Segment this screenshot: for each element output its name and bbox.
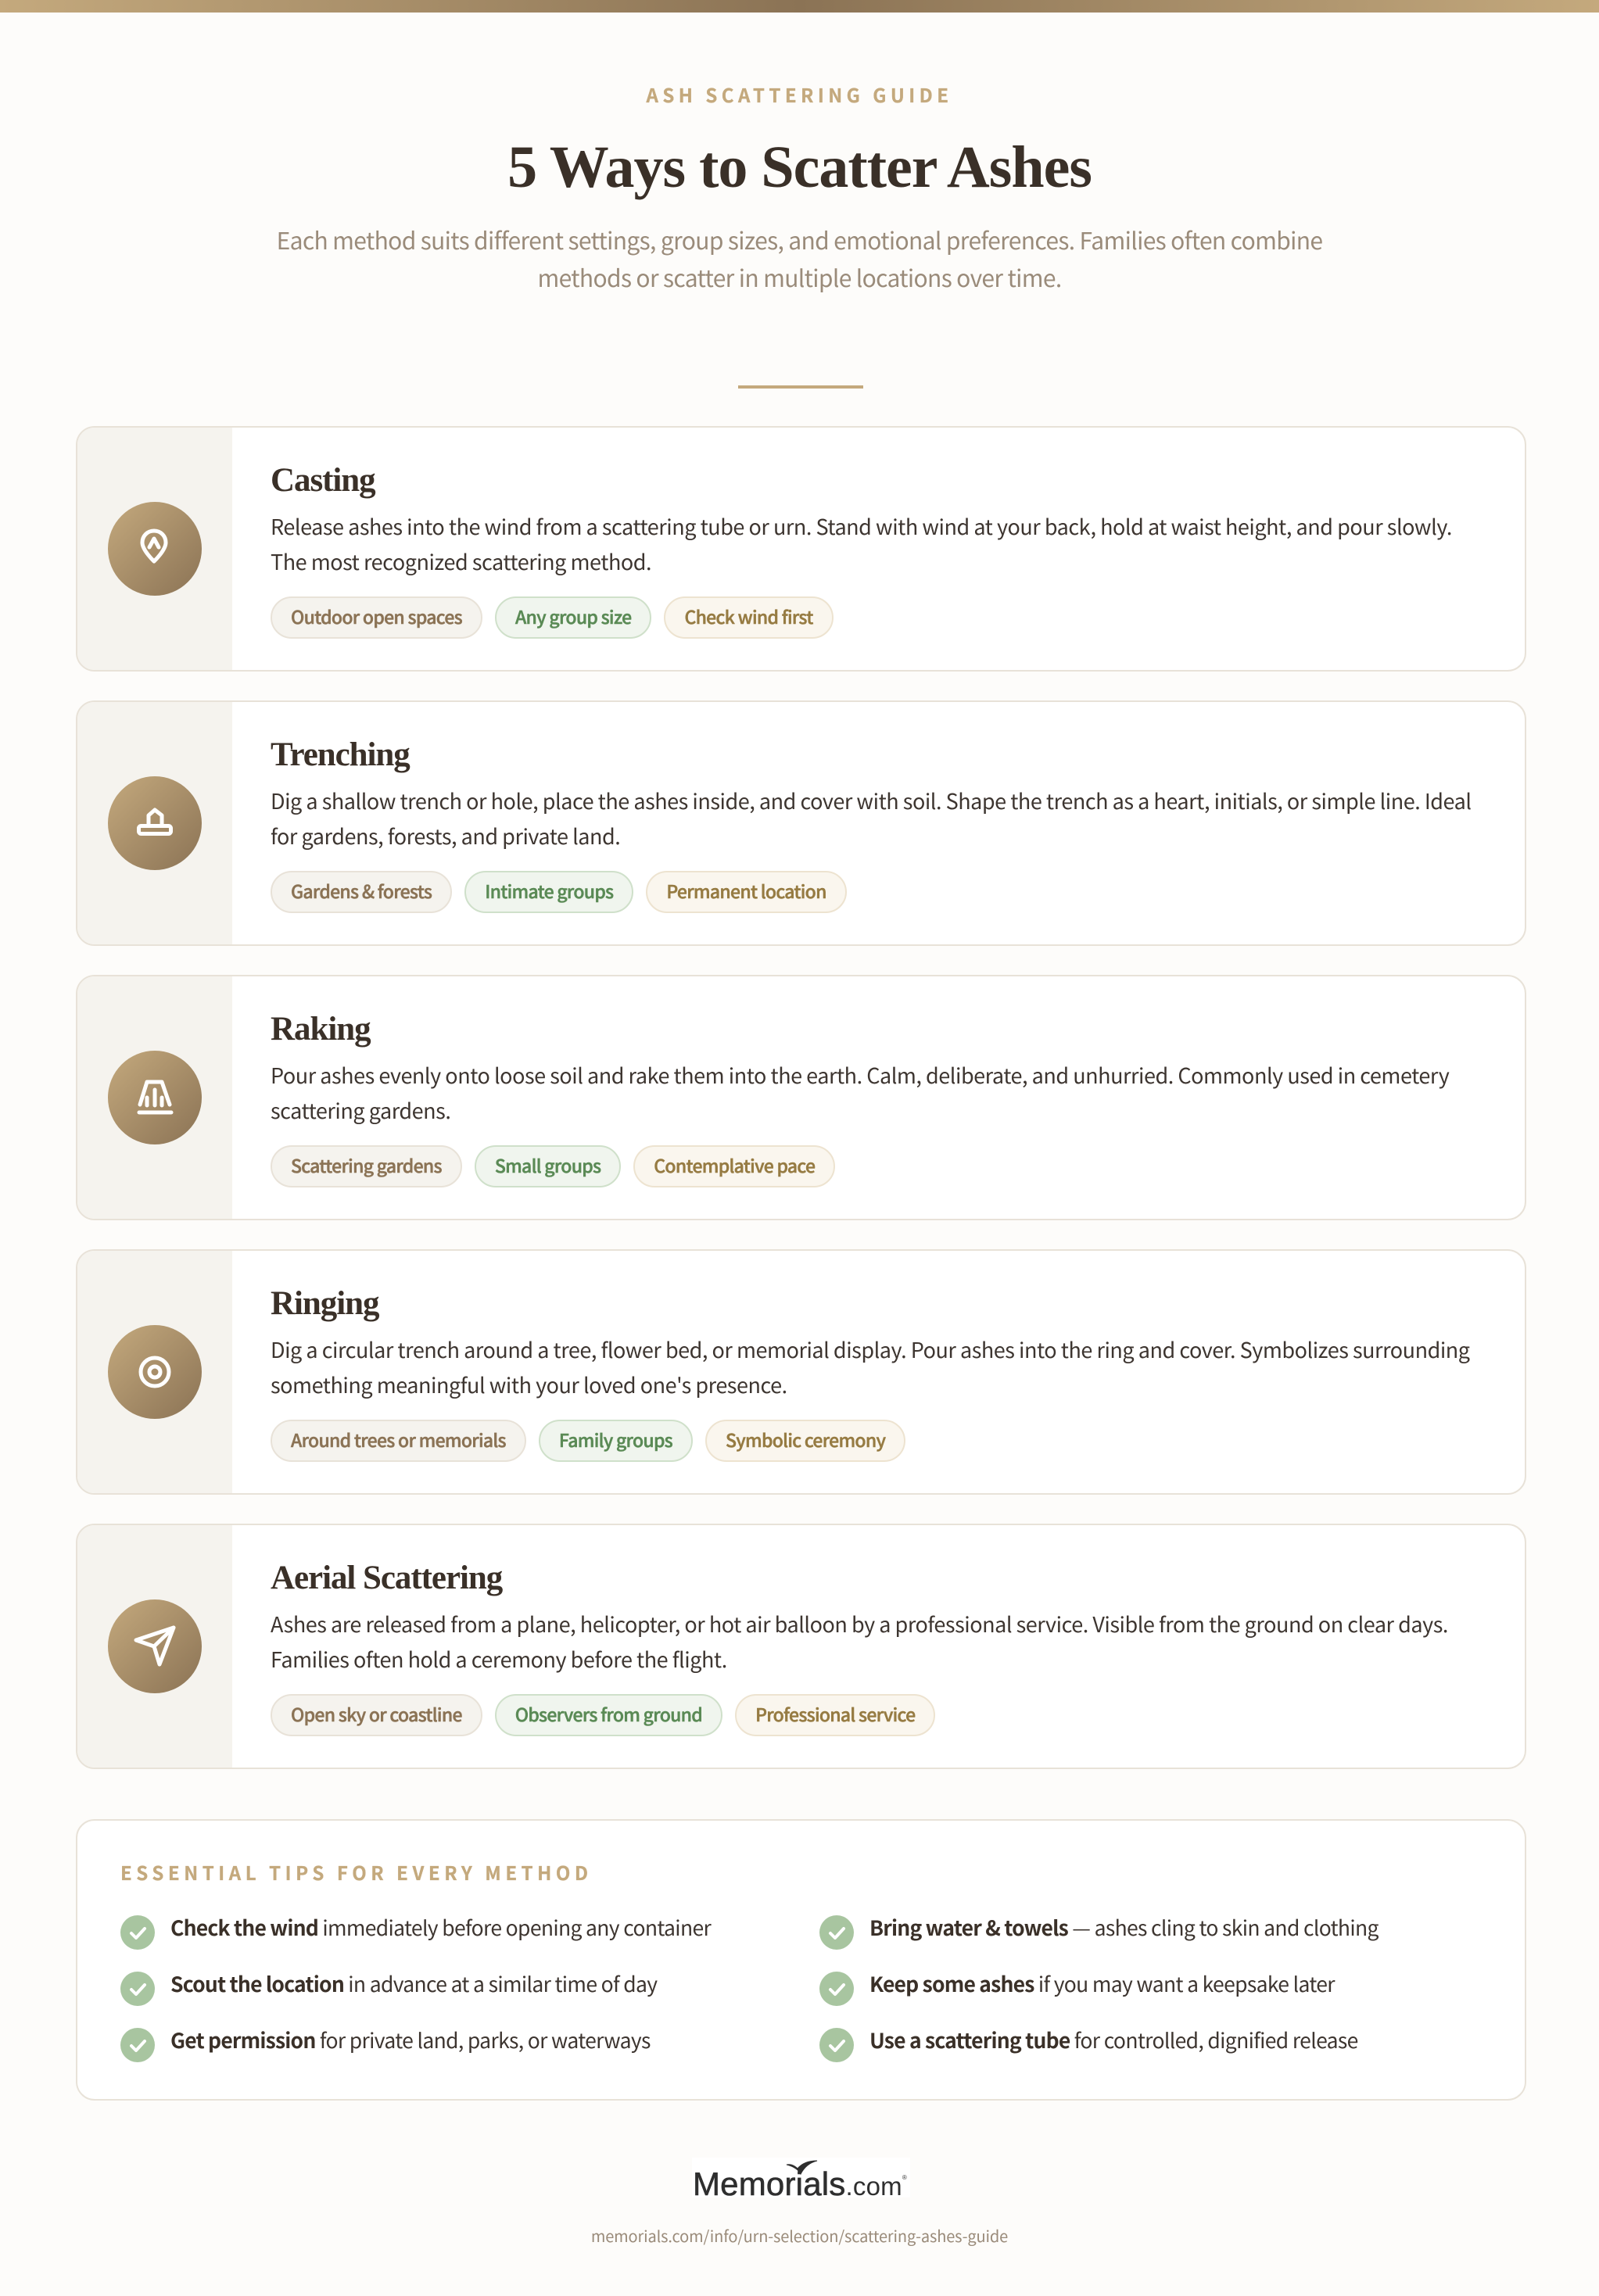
heading: raking: Raking xyxy=(271,1011,371,1048)
source url: memorials.com/info/urn-selection/scattering-ashes-guide xyxy=(591,2224,1008,2247)
description: trenching: for gardens, forests, and private land. xyxy=(271,820,620,851)
description: raking: Pour ashes evenly onto loose soil and rake them into the earth. Calm, deliberate, and unhurried. Commonly used in cemetery xyxy=(271,1059,1449,1090)
icon: trenching xyxy=(108,776,202,870)
description: ringing: Dig a circular trench around a tree, flower bed, or memorial display. Pour ashes into the ring and cover. Symbolizes surrounding xyxy=(271,1334,1470,1364)
logo bird xyxy=(787,2161,818,2175)
eyebrow heading: ASH SCATTERING GUIDE xyxy=(647,81,952,108)
tags: aerial scattering: Observers from ground xyxy=(515,1700,702,1727)
description: aerial scattering xyxy=(271,1608,1448,1674)
tags: casting: Any group size xyxy=(515,603,631,629)
description: ringing: something meaningful with your loved one's presence. xyxy=(271,1369,787,1399)
description: casting: The most recognized scattering method. xyxy=(271,546,651,576)
subtitle: methods or scatter in multiple locations over time. xyxy=(537,260,1062,294)
tags: raking: Small groups xyxy=(495,1152,601,1178)
panel: raking xyxy=(76,975,1526,1220)
tags: casting xyxy=(271,596,834,639)
tips heading: ESSENTIAL TIPS FOR EVERY METHOD xyxy=(120,1858,593,1886)
icon: ringing xyxy=(108,1325,202,1419)
panel: trenching xyxy=(76,700,1526,946)
heading: aerial scattering: Aerial Scattering xyxy=(271,1560,502,1596)
tags: casting: Check wind first xyxy=(684,603,813,629)
tags: casting: Outdoor open spaces xyxy=(291,603,462,629)
tags: ringing: Around trees or memorials xyxy=(291,1426,506,1452)
tags: trenching xyxy=(271,871,847,913)
tags: trenching: Gardens & forests xyxy=(291,877,432,904)
icon: aerial scattering xyxy=(108,1599,202,1693)
logo text: Memorials.com® xyxy=(693,2165,907,2202)
heading: casting: Casting xyxy=(271,462,375,499)
tags: aerial scattering xyxy=(271,1694,935,1736)
description: trenching: Dig a shallow trench or hole, place the ashes inside, and cover with soil. Shape the trench as a heart, initials, or simple line. Ideal xyxy=(271,785,1472,815)
description: ringing xyxy=(271,1334,1470,1399)
tags: aerial scattering: Professional service xyxy=(755,1700,915,1727)
tip item 1: Check the wind immediately before opening any container xyxy=(170,1911,711,1942)
tip item 5: Keep some ashes if you may want a keepsake later xyxy=(869,1968,1335,1998)
tags: ringing: Symbolic ceremony xyxy=(726,1426,885,1452)
subtitle: Each method suits different settings, group sizes, and emotional preferences. Families often combine xyxy=(277,222,1322,256)
tags: trenching: Intimate groups xyxy=(485,877,613,904)
tip item 6: Use a scattering tube for controlled, dignified release xyxy=(869,2024,1358,2054)
description: casting: Release ashes into the wind from a scattering tube or urn. Stand with wind at your back, hold at waist height, and pour slowly. xyxy=(271,510,1452,541)
panel: ringing xyxy=(76,1249,1526,1495)
logo: Memorials.com xyxy=(692,2158,910,2197)
tags: raking xyxy=(271,1145,835,1187)
description: casting xyxy=(271,510,1452,576)
description: trenching xyxy=(271,785,1472,851)
divider xyxy=(738,385,863,389)
tip item 2: Scout the location in advance at a similar time of day xyxy=(170,1968,657,1998)
panel: casting xyxy=(76,426,1526,672)
heading: ringing: Ringing xyxy=(271,1285,378,1322)
tags: raking: Scattering gardens xyxy=(291,1152,442,1178)
description: raking: scattering gardens. xyxy=(271,1094,450,1125)
title: 5 Ways to Scatter Ashes xyxy=(507,134,1092,200)
description: raking xyxy=(271,1059,1450,1125)
tip item 3: Get permission for private land, parks, or waterways xyxy=(170,2024,651,2054)
top gradient bar xyxy=(0,0,1599,13)
panel: aerial scattering xyxy=(76,1524,1526,1769)
description: aerial scattering: Ashes are released from a plane, helicopter, or hot air balloon by a professional service. Visible from the ground on clear days. xyxy=(271,1608,1448,1639)
tags: trenching: Permanent location xyxy=(666,877,826,904)
icon: raking xyxy=(108,1051,202,1144)
tags: ringing: Family groups xyxy=(559,1426,672,1452)
tip item 4: Bring water & towels — ashes cling to skin and clothing xyxy=(869,1911,1379,1942)
tags: ringing xyxy=(271,1420,905,1462)
description: aerial scattering: Families often hold a ceremony before the flight. xyxy=(271,1643,727,1674)
heading: trenching: Trenching xyxy=(271,736,410,773)
icon: casting xyxy=(108,502,202,596)
tags: raking: Contemplative pace xyxy=(654,1152,815,1178)
panel: essential tips xyxy=(76,1819,1526,2101)
subtitle xyxy=(277,222,1322,294)
tags: aerial scattering: Open sky or coastline xyxy=(291,1700,462,1727)
